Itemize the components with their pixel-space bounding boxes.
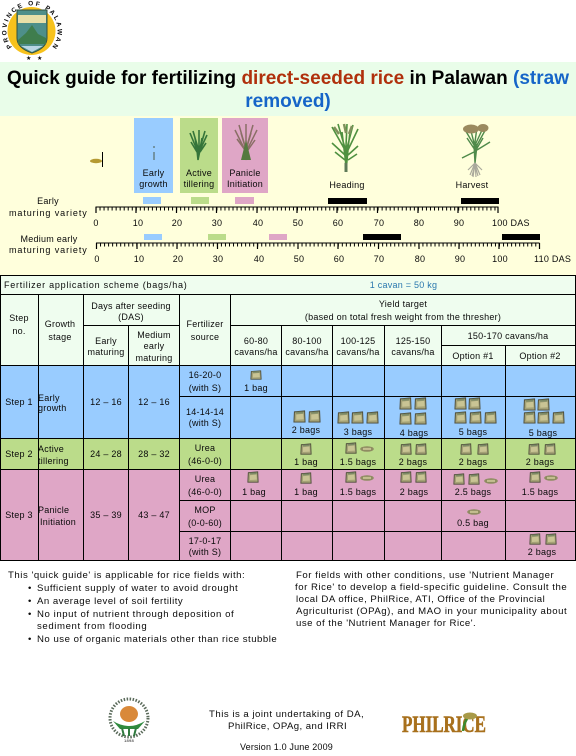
text block: other conditions: local DA office, PhilRice, ATI, Office of the Provincial [296, 594, 545, 605]
chart: medium early maturing timeline: 80 [415, 254, 425, 264]
chart: early maturing timeline: 60 [333, 218, 343, 228]
chart: early maturing timeline: 0 [93, 218, 99, 228]
text block: quick guide conditions: • [28, 609, 32, 620]
table grid lines [0, 275, 576, 560]
text block: other conditions: Agriculturist (OPAg), and MAO in your municipality about [296, 606, 567, 617]
chart: medium early maturing timeline: 20 [173, 254, 183, 264]
row: step 3 panicle initiation: (with S) [189, 547, 221, 557]
row: step 1 early growth: 14-14-14 [186, 407, 224, 417]
chart: early maturing timeline: 40 [253, 218, 263, 228]
row: step 2 active tillering: Step 2 [5, 449, 33, 459]
row: step 1 early growth [5, 370, 564, 438]
panel: growth stage illustrations [90, 118, 490, 193]
label: harvest: Harvest [456, 180, 489, 190]
text block: other conditions: For fields with other conditions, use 'Nutrient Manager [296, 570, 554, 581]
column headers: Step [9, 313, 29, 323]
text block: joint undertaking: This is a joint undertaking of DA, [209, 709, 364, 720]
table heading: Fertilizer application scheme (bags/ha) [4, 280, 187, 290]
text block: other conditions [295, 570, 567, 629]
panel: panicle initiation: Initiation [227, 179, 263, 189]
chart: early maturing timeline: 50 [293, 218, 303, 228]
label: medium early maturing variety: maturing variety [9, 245, 87, 255]
row: step 1 early growth: 2 bags [292, 425, 321, 435]
row: step 3 panicle initiation: 43 – 47 [138, 510, 170, 520]
logo: Province of Palawan seal: ★ [26, 55, 32, 62]
panel: early growth: growth [139, 179, 168, 189]
text block: quick guide conditions: • [28, 583, 32, 594]
row: step 1 early growth: 12 – 16 [90, 397, 122, 407]
text block: quick guide conditions [8, 570, 277, 645]
chart: medium early maturing timeline: 0 [94, 254, 100, 264]
row: step 3 panicle initiation: 1 bag [294, 487, 318, 497]
chart: medium early maturing timeline: 110 DAS [534, 254, 571, 264]
column headers: cavans/ha [234, 347, 278, 357]
row: step 3 panicle initiation: 1.5 bags [522, 487, 559, 497]
row: step 1 early growth: 4 bags [400, 428, 429, 438]
column headers: Yield target [379, 299, 427, 309]
row: step 2 active tillering: Active [38, 444, 64, 454]
chart: early maturing timeline: 80 [414, 218, 424, 228]
row: step 2 active tillering: tillering [38, 456, 69, 466]
text block: quick guide conditions: sediment from flooding [37, 621, 147, 632]
row: step 3 panicle initiation: (46-0-0) [188, 487, 222, 497]
logo: Province of Palawan seal: PROVINCE OF PALAWAN [2, 0, 62, 50]
chart: medium early maturing timeline: 10 [134, 254, 144, 264]
row: step 2 active tillering: 1.5 bags [340, 457, 377, 467]
row: step 1 early growth: Step 1 [5, 397, 33, 407]
chart: medium early maturing timeline: 40 [254, 254, 264, 264]
title: Quick guide for fertilizing direct-seeded rice in Palawan (straw [7, 68, 569, 89]
text block: other conditions: use of the 'Nutrient Manager for Rice'. [296, 618, 476, 629]
logo: Province of Palawan seal: ★ [37, 55, 43, 62]
chart: early maturing timeline: 10 [133, 218, 143, 228]
label: medium early maturing variety: Medium early [20, 234, 78, 244]
row: step 2 active tillering: 1 bag [294, 457, 318, 467]
column headers: 80-100 [292, 336, 322, 346]
row: step 3 panicle initiation: 2 bags [528, 547, 557, 557]
row: step 2 active tillering [5, 443, 555, 467]
row: step 3 panicle initiation [5, 472, 559, 557]
column headers: Days after seeding [91, 301, 171, 311]
panel: active tillering [180, 118, 218, 193]
column headers: (DAS) [118, 312, 144, 322]
row: step 3 panicle initiation: 17-0-17 [189, 536, 221, 546]
row: step 3 panicle initiation: 35 – 39 [90, 510, 122, 520]
panel: early growth [134, 118, 173, 193]
title [7, 68, 569, 112]
row: step 1 early growth: 1 bag [244, 383, 268, 393]
column headers: Option #1 [452, 351, 494, 361]
text block: quick guide conditions: • [28, 596, 32, 607]
column headers: Option #2 [519, 351, 561, 361]
label: early maturing variety [9, 196, 87, 218]
column headers: Fertilizer [186, 319, 224, 329]
text block: quick guide conditions: No input of nutrient through deposition of [37, 609, 234, 620]
column headers: 125-150 [396, 336, 430, 346]
text block: other conditions: for Rice' to develop a field-specific guideline. Consult the [295, 582, 567, 593]
column headers: no. [12, 326, 26, 336]
text block: quick guide conditions: Sufficient supply of water to avoid drought [37, 583, 238, 594]
chart: early maturing timeline: 20 [172, 218, 182, 228]
text block: joint undertaking: PhilRice, OPAg, and IRRI [228, 721, 347, 732]
icon: harvest plant [462, 124, 490, 177]
chart: early maturing timeline: 30 [212, 218, 222, 228]
chart: early maturing timeline: 90 [454, 218, 464, 228]
row: step 1 early growth: Early [38, 393, 60, 403]
title: removed) [245, 91, 331, 112]
chart: medium early maturing timeline: 50 [294, 254, 304, 264]
text block: quick guide conditions: No use of organic materials other than rice stubble [37, 634, 277, 645]
row: step 3 panicle initiation: Step 3 [5, 510, 33, 520]
logo: Department of Agriculture seal [110, 699, 148, 743]
row: step 1 early growth: (with S) [189, 418, 221, 428]
column headers: Growth [45, 319, 75, 329]
column headers: maturing [135, 353, 173, 363]
row: step 3 panicle initiation: Urea [195, 474, 215, 484]
chart: early maturing timeline: 100 DAS [492, 218, 530, 228]
column headers: cavans/ha [285, 347, 329, 357]
label: early maturing variety: maturing variety [9, 208, 87, 218]
table: fertilizer application scheme [0, 275, 576, 560]
column headers: maturing [87, 347, 125, 357]
panel: active tillering: Active [186, 168, 212, 178]
column headers [9, 299, 561, 363]
row: step 1 early growth: 5 bags [459, 427, 488, 437]
label: heading: Heading [329, 180, 365, 190]
row: step 1 early growth: 12 – 16 [138, 397, 170, 407]
panel: panicle initiation: Panicle [229, 168, 261, 178]
chart: early maturing timeline [9, 196, 530, 228]
column headers: stage [48, 332, 72, 342]
text block: quick guide conditions: An average level of soil fertility [37, 596, 183, 607]
column headers: Medium [137, 330, 171, 340]
column headers: 100-125 [341, 336, 375, 346]
row: step 1 early growth: 5 bags [529, 428, 558, 438]
row: step 1 early growth: 16-20-0 [189, 370, 221, 380]
row: step 2 active tillering: 2 bags [459, 457, 488, 467]
column headers: source [191, 332, 219, 342]
row: step 3 panicle initiation: MOP [194, 505, 216, 515]
row: step 2 active tillering: Urea [195, 443, 215, 453]
version line: Version 1.0 June 2009 [240, 742, 333, 752]
row: step 3 panicle initiation: 0.5 bag [457, 518, 489, 528]
column headers: 60-80 [244, 336, 268, 346]
column headers: 150-170 cavans/ha [468, 331, 548, 341]
chart: medium early maturing timeline: 30 [213, 254, 223, 264]
row: step 3 panicle initiation: Initiation [40, 517, 76, 527]
chart: medium early maturing timeline: 70 [374, 254, 384, 264]
chart: medium early maturing timeline: 100 [492, 254, 508, 264]
row: step 1 early growth: 3 bags [344, 427, 373, 437]
label: early maturing variety: Early [37, 196, 59, 206]
row: step 3 panicle initiation: 1.5 bags [340, 487, 377, 497]
column headers: Early [95, 336, 117, 346]
row: step 2 active tillering: 24 – 28 [90, 449, 122, 459]
row: step 3 panicle initiation: (0-0-60) [188, 518, 222, 528]
row: step 2 active tillering: 28 – 32 [138, 449, 170, 459]
text block: quick guide conditions: This 'quick guide' is applicable for rice fields with: [8, 570, 245, 581]
column headers: (based on total fresh weight from the thresher) [305, 312, 501, 322]
chart: medium early maturing timeline: 90 [455, 254, 465, 264]
column headers: cavans/ha [391, 347, 435, 357]
row: step 3 panicle initiation: 2 bags [400, 487, 429, 497]
chart: medium early maturing timeline [9, 234, 571, 264]
table backgrounds [0, 275, 576, 560]
icon: seed [90, 152, 102, 167]
row: step 1 early growth: (with S) [189, 383, 221, 393]
row: step 2 active tillering: 2 bags [526, 457, 555, 467]
panel: panicle initiation [222, 118, 268, 193]
panel: active tillering: tillering [184, 179, 214, 189]
row: step 2 active tillering: (46-0-0) [188, 456, 222, 466]
row: step 3 panicle initiation: 1 bag [242, 487, 266, 497]
panel: early growth: Early [143, 168, 165, 178]
icon: heading plant [332, 124, 358, 172]
text block: joint undertaking [209, 709, 364, 732]
column headers: early [144, 341, 165, 351]
chart: early maturing timeline: 70 [374, 218, 384, 228]
conversion note: 1 cavan = 50 kg [370, 280, 437, 290]
row: step 3 panicle initiation: 2.5 bags [455, 487, 492, 497]
chart: medium early maturing timeline: 60 [334, 254, 344, 264]
row: step 2 active tillering: 2 bags [399, 457, 428, 467]
text block: quick guide conditions: • [28, 634, 32, 645]
column headers: cavans/ha [336, 347, 380, 357]
label: medium early maturing variety [9, 234, 87, 255]
row: step 3 panicle initiation: Panicle [38, 505, 69, 515]
logo: PhilRice: PHILRICE [402, 712, 486, 737]
logo: Department of Agriculture seal: 1898 [124, 738, 134, 743]
row: step 1 early growth: growth [38, 403, 67, 413]
